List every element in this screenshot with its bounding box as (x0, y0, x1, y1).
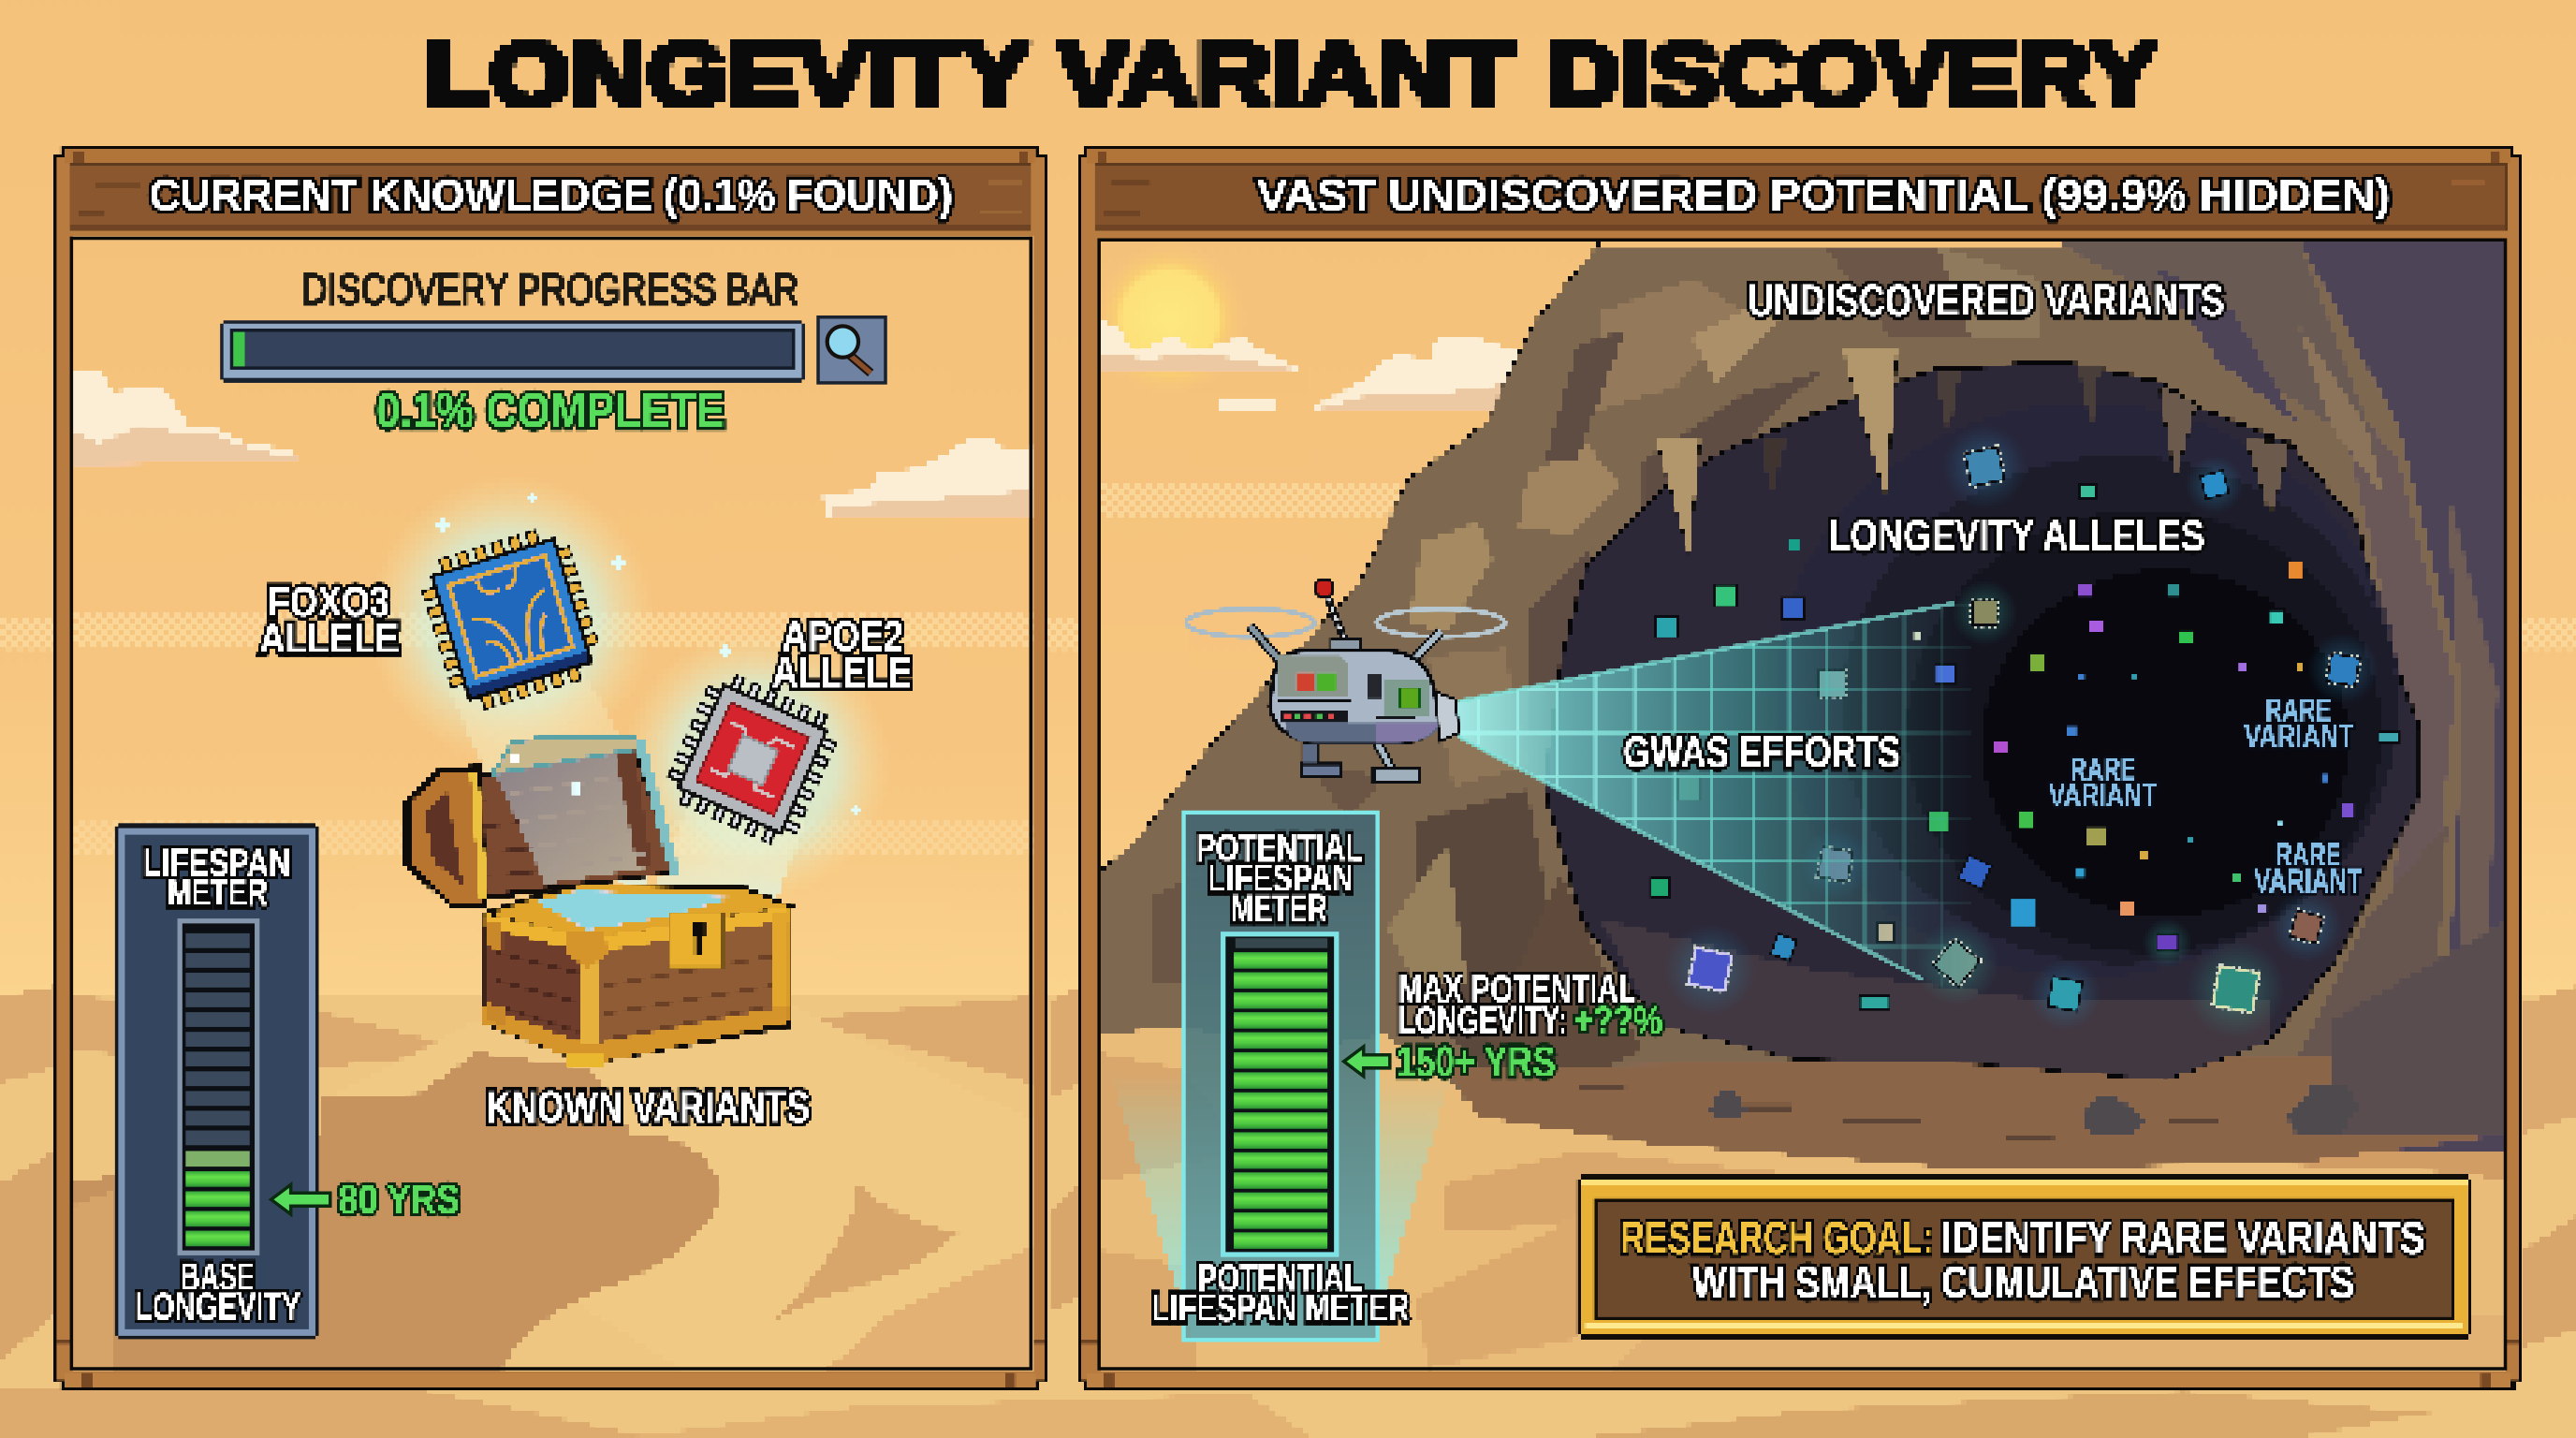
label: base longevity: BASE (181, 1255, 255, 1299)
panel border: right inner window outline (1099, 240, 2506, 1369)
label: rare variant 2 (2244, 692, 2354, 756)
label: undiscovered variants: UNDISCOVERED VARIANTS (1748, 276, 2224, 326)
callout: research goal (1577, 1175, 2471, 1339)
label: APOE2 allele: APOE2 (782, 612, 903, 660)
label: FOXO3 allele: FOXO3 (268, 578, 389, 625)
label: APOE2 allele (772, 612, 912, 697)
label: max potential longevity: MAX POTENTIAL (1398, 967, 1636, 1011)
label: FOXO3 allele (259, 578, 399, 662)
floor rocks (1708, 1084, 2359, 1137)
label: rare variant 2: VARIANT (2244, 719, 2354, 756)
label: rare variant 3: VARIANT (2254, 863, 2363, 900)
sparkles (435, 493, 861, 815)
label: 80 yrs: 80 YRS (339, 1177, 460, 1223)
label: rare variant 1 (2049, 752, 2158, 814)
light beam from potential meter (1110, 1071, 1453, 1339)
label: lifespan meter (143, 841, 291, 914)
label: lifespan meter: METER (168, 871, 268, 914)
clouds (1101, 318, 1519, 413)
large chips (1689, 448, 2360, 1012)
panel scene: left sky and dunes (70, 238, 1032, 1373)
illustration: treasure chest with alleles (366, 475, 890, 1068)
hidden variant chips (1651, 424, 2398, 1038)
label: potential lifespan meter (bottom) (1151, 1256, 1410, 1329)
text: research goal highlight: RESEARCH GOAL: (1620, 1213, 1934, 1264)
heading: current knowledge: CURRENT KNOWLEDGE (0.1% FOUND) (150, 171, 953, 221)
panel frame: left wooden frame (54, 146, 1048, 1390)
label: potential lifespan meter (top): METER (1231, 887, 1327, 931)
panel frame: right wooden frame (1077, 146, 2522, 1390)
label: discovery progress bar: DISCOVERY PROGRESS BAR (302, 266, 798, 314)
label: potential lifespan meter (top): LIFESPAN (1208, 856, 1354, 900)
label: GWAS efforts: GWAS EFFORTS (1623, 728, 1901, 778)
potential lifespan meter (1184, 813, 1378, 1340)
heading: vast undiscovered potential: VAST UNDISCOVERED POTENTIAL (99.9% HIDDEN) (1257, 171, 2391, 221)
label: rare variant 3: RARE (2276, 837, 2341, 873)
label: potential lifespan meter (bottom): POTENTIAL (1197, 1256, 1362, 1300)
label: longevity alleles: LONGEVITY ALLELES (1828, 511, 2204, 561)
icon: FOXO3 chip (414, 521, 607, 717)
icon: magnifying glass (816, 315, 887, 385)
icon: scanning drone (1186, 580, 1505, 782)
label: APOE2 allele: ALLELE (772, 649, 912, 697)
label: FOXO3 allele: ALLELE (259, 614, 399, 662)
scanning cone with grid: GWAS efforts (1457, 592, 1975, 1003)
cave opening (1544, 346, 2420, 1079)
text: goal line one: IDENTIFY RARE VARIANTS (1942, 1213, 2425, 1264)
lifespan meter (115, 823, 318, 1339)
icon: open treasure chest (404, 738, 792, 1068)
icon: sun (1112, 258, 1230, 377)
label: potential lifespan meter (bottom): LIFESPAN METER (1151, 1285, 1410, 1329)
sand (1097, 970, 2507, 1371)
label: base longevity (135, 1255, 300, 1328)
panel: vast undiscovered potential (1077, 146, 2522, 1390)
rock mountain (1097, 242, 2507, 1170)
panel border: inner window outline (71, 238, 1031, 1369)
label: potential lifespan meter (top) (1196, 826, 1364, 931)
labels: right panel text (1151, 171, 2471, 1339)
label: max potential longevity: +??% (1573, 998, 1662, 1042)
label: rare variant 3 (2254, 837, 2363, 900)
label: max potential longevity (1398, 967, 1662, 1042)
label: max potential longevity: LONGEVITY: (1398, 998, 1567, 1042)
panel: current knowledge (54, 146, 1048, 1390)
title: LONGEVITY VARIANT DISCOVERY (426, 25, 2159, 125)
glow beams from chest (366, 475, 890, 907)
label: 0.1% complete: 0.1% COMPLETE (376, 383, 724, 438)
label: 150+ yrs: 150+ YRS (1397, 1038, 1556, 1086)
arrow: 150+ years (1344, 1047, 1390, 1077)
label: known variants: KNOWN VARIANTS (487, 1083, 810, 1133)
label: rare variant 1: VARIANT (2049, 778, 2158, 814)
labels: left panel text (135, 171, 953, 1328)
label: rare variant 2: RARE (2265, 692, 2331, 728)
icon: APOE2 chip (659, 666, 845, 852)
label: base longevity: LONGEVITY (135, 1284, 300, 1328)
arrow: 80 years (271, 1184, 330, 1214)
label: potential lifespan meter (top): POTENTIAL (1196, 826, 1364, 870)
label: lifespan meter: LIFESPAN (143, 841, 291, 884)
panel scene: sky, sun and cave (1094, 240, 2507, 1371)
label: rare variant 1: RARE (2070, 752, 2136, 788)
progress bar (220, 320, 805, 383)
text: goal line two: WITH SMALL, CUMULATIVE EFFECTS (1692, 1258, 2354, 1309)
